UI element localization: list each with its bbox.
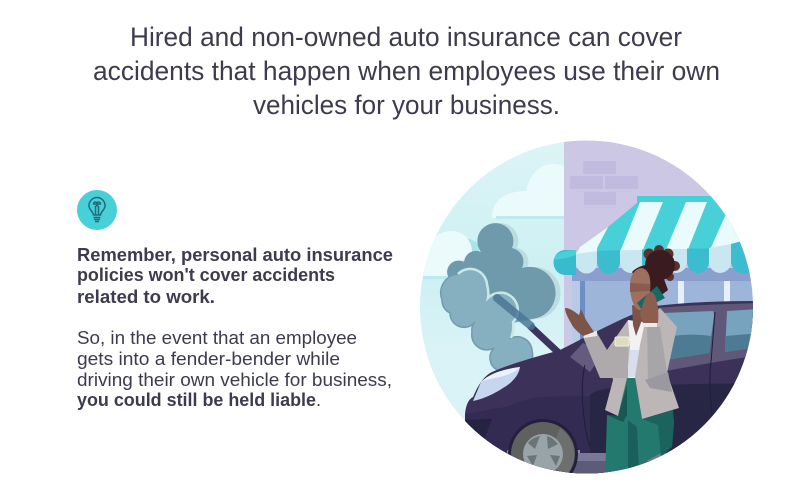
callout: bold reminder: Remember, personal auto insurance [77, 245, 393, 265]
title: vehicles for your business. [253, 90, 560, 120]
name badge [615, 337, 629, 346]
shop window [572, 268, 757, 353]
title: Hired and non-owned auto insurance can cover [130, 22, 682, 52]
hair [632, 245, 680, 300]
text block: liability explanation: driving their own vehicle for business, [77, 370, 392, 390]
face [630, 268, 650, 310]
title: accidents that happen when employees use their own [93, 56, 720, 86]
text block: liability explanation: you could still be held liable [77, 390, 316, 410]
smoke: front plume [441, 269, 533, 370]
text block: liability explanation: . [316, 390, 321, 410]
hand on phone [640, 292, 658, 323]
callout: bold reminder [77, 245, 393, 307]
awning end cap [554, 250, 576, 275]
raised hand [565, 308, 594, 336]
icon: light bulb [77, 190, 117, 230]
neck [632, 305, 642, 336]
hood prop [497, 298, 560, 354]
window frame [658, 303, 753, 370]
title [93, 22, 720, 120]
cloud: upper [492, 164, 564, 219]
illustration: woman by broken-down car [420, 140, 760, 489]
trousers [605, 377, 674, 480]
wheel [508, 419, 578, 473]
car lower shade [465, 406, 624, 474]
cloud: lower [423, 231, 485, 279]
text block: liability explanation: So, in the event that an employee [77, 328, 357, 348]
text block: liability explanation [77, 328, 392, 410]
shirt [628, 320, 644, 378]
woman [565, 245, 680, 480]
smoke: back plume [447, 223, 561, 325]
text block: liability explanation: gets into a fender-bender while [77, 349, 340, 369]
callout: bold reminder: related to work. [77, 287, 215, 307]
sky [420, 142, 564, 420]
wall [564, 140, 754, 355]
car windows [663, 311, 714, 360]
phone [637, 286, 665, 310]
awning [554, 196, 760, 275]
jacket [583, 308, 679, 419]
callout: bold reminder: policies won't cover accidents [77, 265, 335, 285]
car body [465, 301, 760, 480]
headlight [473, 367, 520, 401]
ground strip [507, 450, 666, 474]
awning valance [576, 242, 750, 274]
